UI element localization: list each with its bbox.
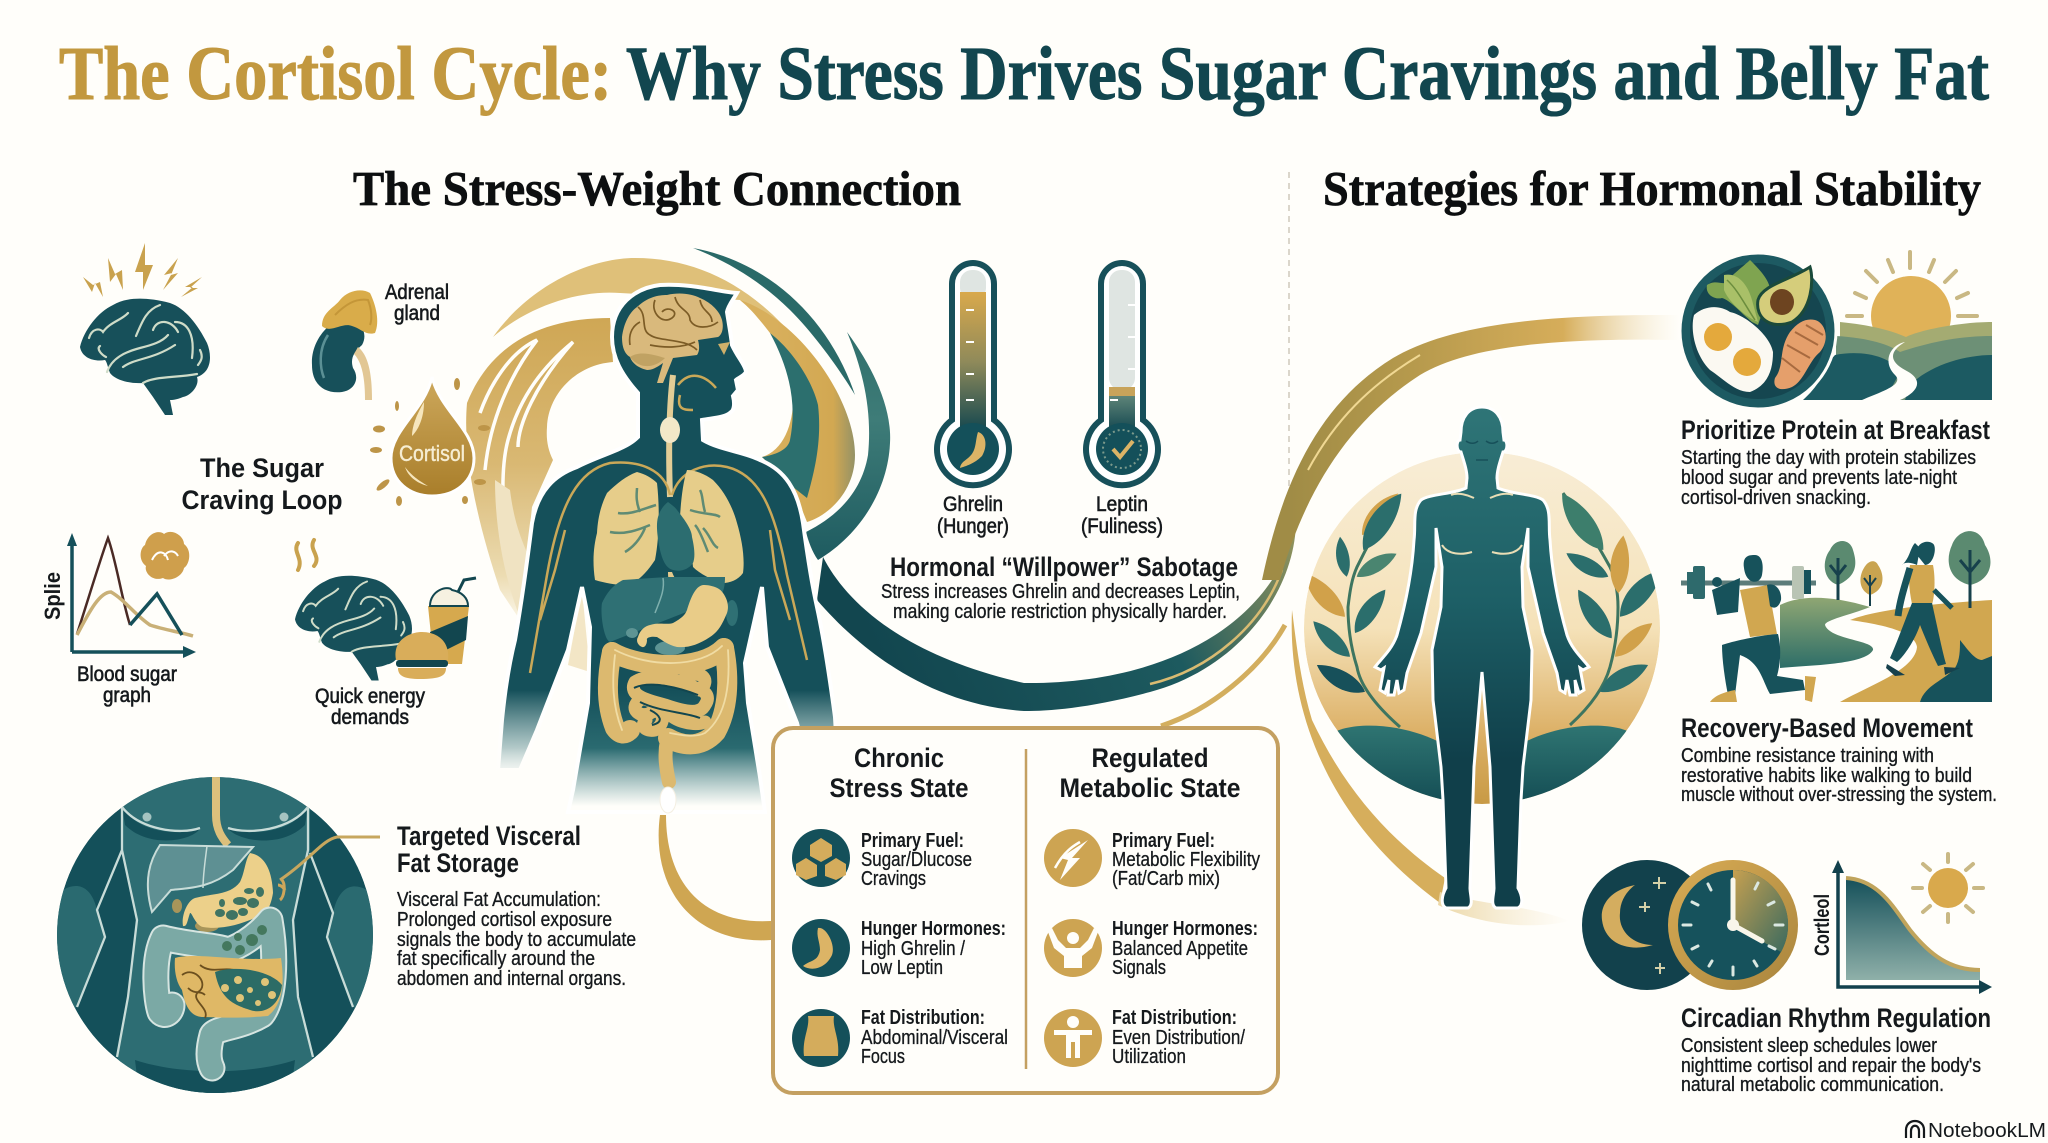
text: targeted visceral fat storage: fat specifically around the — [397, 948, 595, 970]
stomach — [637, 585, 728, 647]
icon: protein breakfast plate — [1680, 253, 1836, 409]
text: circadian rhythm regulation — [1681, 1003, 1991, 1096]
cortisol droplet — [370, 377, 490, 506]
text: circadian rhythm regulation: natural metabolic communication. — [1681, 1074, 1944, 1096]
teal swoosh — [693, 248, 890, 560]
lifter barbell — [1681, 580, 1816, 586]
logo: notebooklm: NotebookLM — [1928, 1120, 2046, 1142]
text: prioritize protein at breakfast: Starting the day with protein stabilizes — [1681, 447, 1976, 469]
text: hormonal willpower sabotage — [881, 552, 1240, 623]
row: hunger hormones regulated: Balanced Appetite — [1112, 938, 1248, 960]
text: targeted visceral fat storage: Prolonged cortisol exposure — [397, 909, 612, 931]
heading: regulated metabolic state — [1060, 743, 1240, 803]
title: The Cortisol Cycle: — [59, 32, 612, 116]
icon: balanced person flexing — [1044, 919, 1102, 977]
text: targeted visceral fat storage: Fat Storage — [397, 848, 519, 878]
row: primary fuel regulated: Metabolic Flexibility — [1112, 849, 1260, 871]
illustration: balanced body with leaves — [1297, 407, 1669, 908]
chart: cortisol decline curve: Cortleol — [1811, 894, 1834, 956]
label: blood sugar graph: graph — [103, 684, 151, 707]
icon: standing figure — [1044, 1009, 1102, 1067]
body silhouette — [498, 285, 838, 812]
text: recovery-based movement: Combine resistance training with — [1681, 745, 1934, 767]
row: fat distribution chronic: Focus — [861, 1046, 905, 1068]
chart: blood sugar spike graph: Splie — [40, 572, 65, 620]
label: quick energy demands: demands — [331, 706, 409, 729]
row: fat distribution chronic: Fat Distribution: — [861, 1007, 985, 1029]
heading: chronic stress state: Stress State — [830, 773, 968, 803]
liver — [601, 577, 725, 642]
icon: sun — [1913, 854, 1983, 922]
icon: stressed brain with lightning — [80, 243, 210, 415]
illustration: visceral fat abdomen — [50, 775, 380, 1100]
trees — [1825, 531, 1990, 585]
thermometer: leptin — [1086, 263, 1158, 485]
connector curves — [659, 315, 1680, 940]
row: hunger hormones chronic — [861, 918, 1006, 979]
text: recovery-based movement: muscle without over-stressing the system. — [1681, 784, 1997, 806]
icon: sugar cubes — [792, 829, 850, 887]
text: circadian rhythm regulation: Consistent sleep schedules lower — [1681, 1035, 1937, 1057]
text: prioritize protein at breakfast: blood sugar and prevents late-night — [1681, 467, 1957, 489]
heading: the sugar craving loop: The Sugar — [200, 453, 324, 483]
text: targeted visceral fat storage: signals the body to accumulate — [397, 929, 636, 951]
icon: stomach — [792, 919, 850, 977]
row: fat distribution chronic: Abdominal/Visceral — [861, 1027, 1008, 1049]
text: prioritize protein at breakfast — [1681, 415, 1990, 509]
text: targeted visceral fat storage — [397, 821, 636, 990]
cortisol droplet: Cortisol — [399, 441, 465, 466]
row: hunger hormones chronic: Low Leptin — [861, 957, 943, 979]
text: prioritize protein at breakfast: Prioritize Protein at Breakfast — [1681, 415, 1990, 445]
text: targeted visceral fat storage: Targeted Visceral — [397, 821, 581, 851]
row: primary fuel regulated — [1112, 830, 1260, 890]
row: hunger hormones regulated: Hunger Hormones: — [1112, 918, 1258, 940]
label: leptin — [1081, 493, 1163, 538]
icon: abdominal waist — [792, 1009, 850, 1067]
chart: cortisol decline curve — [1811, 860, 1992, 994]
row: primary fuel chronic — [861, 830, 972, 890]
heading: the sugar craving loop — [182, 453, 342, 515]
row: hunger hormones chronic: High Ghrelin / — [861, 938, 965, 960]
heading: the stress-weight connection: The Stress-Weight Connection — [353, 161, 961, 216]
row: fat distribution regulated: Fat Distribution: — [1112, 1007, 1237, 1029]
label: adrenal gland: Adrenal — [385, 281, 449, 304]
text: circadian rhythm regulation: nighttime cortisol and repair the body's — [1681, 1055, 1981, 1077]
label: blood sugar graph — [77, 663, 177, 707]
label: adrenal gland: gland — [394, 302, 440, 325]
facial detail — [718, 342, 730, 355]
brain — [622, 294, 723, 383]
row: hunger hormones regulated: Signals — [1112, 957, 1166, 979]
row: primary fuel chronic: Cravings — [861, 868, 926, 890]
heart — [657, 502, 694, 571]
text: targeted visceral fat storage: abdomen and internal organs. — [397, 968, 626, 990]
text: recovery-based movement: restorative habits like walking to build — [1681, 765, 1972, 787]
text: targeted visceral fat storage: Visceral Fat Accumulation: — [397, 889, 601, 911]
row: hunger hormones regulated — [1112, 918, 1258, 979]
icon: brain with quick energy foods — [295, 540, 476, 680]
text: hormonal willpower sabotage: Hormonal “Willpower” Sabotage — [890, 552, 1238, 582]
walker — [1917, 542, 1935, 565]
row: fat distribution chronic — [861, 1007, 1008, 1068]
title — [59, 32, 1989, 116]
thermometer: ghrelin — [937, 263, 1009, 485]
text: hormonal willpower sabotage: making calorie restriction physically harder. — [893, 601, 1227, 623]
row: fat distribution regulated: Utilization — [1112, 1046, 1186, 1068]
chart: blood sugar spike graph — [40, 532, 196, 658]
icon: adrenal gland — [312, 290, 377, 400]
panel: comparison of chronic and regulated states — [773, 728, 1278, 1093]
heading: regulated metabolic state: Metabolic State — [1060, 773, 1240, 803]
text: circadian rhythm regulation: Circadian Rhythm Regulation — [1681, 1003, 1991, 1033]
text: hormonal willpower sabotage: Stress increases Ghrelin and decreases Leptin, — [881, 581, 1240, 603]
label: ghrelin — [937, 493, 1009, 538]
icon: metabolic flexibility bolt — [1044, 829, 1102, 887]
gold swirl around head — [466, 258, 855, 672]
heading: chronic stress state: Chronic — [854, 743, 944, 773]
calm human figure — [1375, 407, 1589, 908]
row: primary fuel chronic: Sugar/Dlucose — [861, 849, 972, 871]
label: quick energy demands: Quick energy — [315, 685, 425, 708]
lifter — [1744, 555, 1763, 582]
label: leptin: (Fuliness) — [1081, 515, 1163, 538]
label: quick energy demands — [315, 685, 425, 729]
label: ghrelin: Ghrelin — [943, 493, 1003, 516]
icon: sunrise landscape — [1803, 252, 1992, 405]
spine and nerves — [669, 375, 673, 497]
row: primary fuel regulated: Primary Fuel: — [1112, 830, 1215, 852]
heading: the sugar craving loop: Craving Loop — [182, 485, 342, 515]
lungs — [594, 472, 659, 585]
text: recovery-based movement — [1681, 713, 1997, 806]
label: ghrelin: (Hunger) — [937, 515, 1009, 538]
label: adrenal gland — [385, 281, 449, 325]
label: leptin: Leptin — [1096, 493, 1148, 516]
heading: strategies for hormonal stability: Strategies for Hormonal Stability — [1323, 161, 1981, 216]
label: blood sugar graph: Blood sugar — [77, 663, 177, 686]
spine tip droplet — [660, 787, 676, 813]
row: primary fuel regulated: (Fat/Carb mix) — [1112, 868, 1220, 890]
text: prioritize protein at breakfast: cortisol-driven snacking. — [1681, 487, 1871, 509]
row: primary fuel chronic: Primary Fuel: — [861, 830, 964, 852]
intestines — [608, 646, 729, 782]
row: fat distribution regulated: Even Distribution/ — [1112, 1027, 1245, 1049]
heading: regulated metabolic state: Regulated — [1092, 743, 1208, 773]
heading: chronic stress state — [830, 743, 968, 803]
icon: night moon and clock — [1582, 860, 1798, 990]
illustration: resistance training and walking — [1681, 531, 1992, 702]
central human body with organs — [490, 285, 845, 812]
text: recovery-based movement: Recovery-Based Movement — [1681, 713, 1973, 743]
row: fat distribution regulated — [1112, 1007, 1245, 1068]
row: hunger hormones chronic: Hunger Hormones: — [861, 918, 1006, 940]
